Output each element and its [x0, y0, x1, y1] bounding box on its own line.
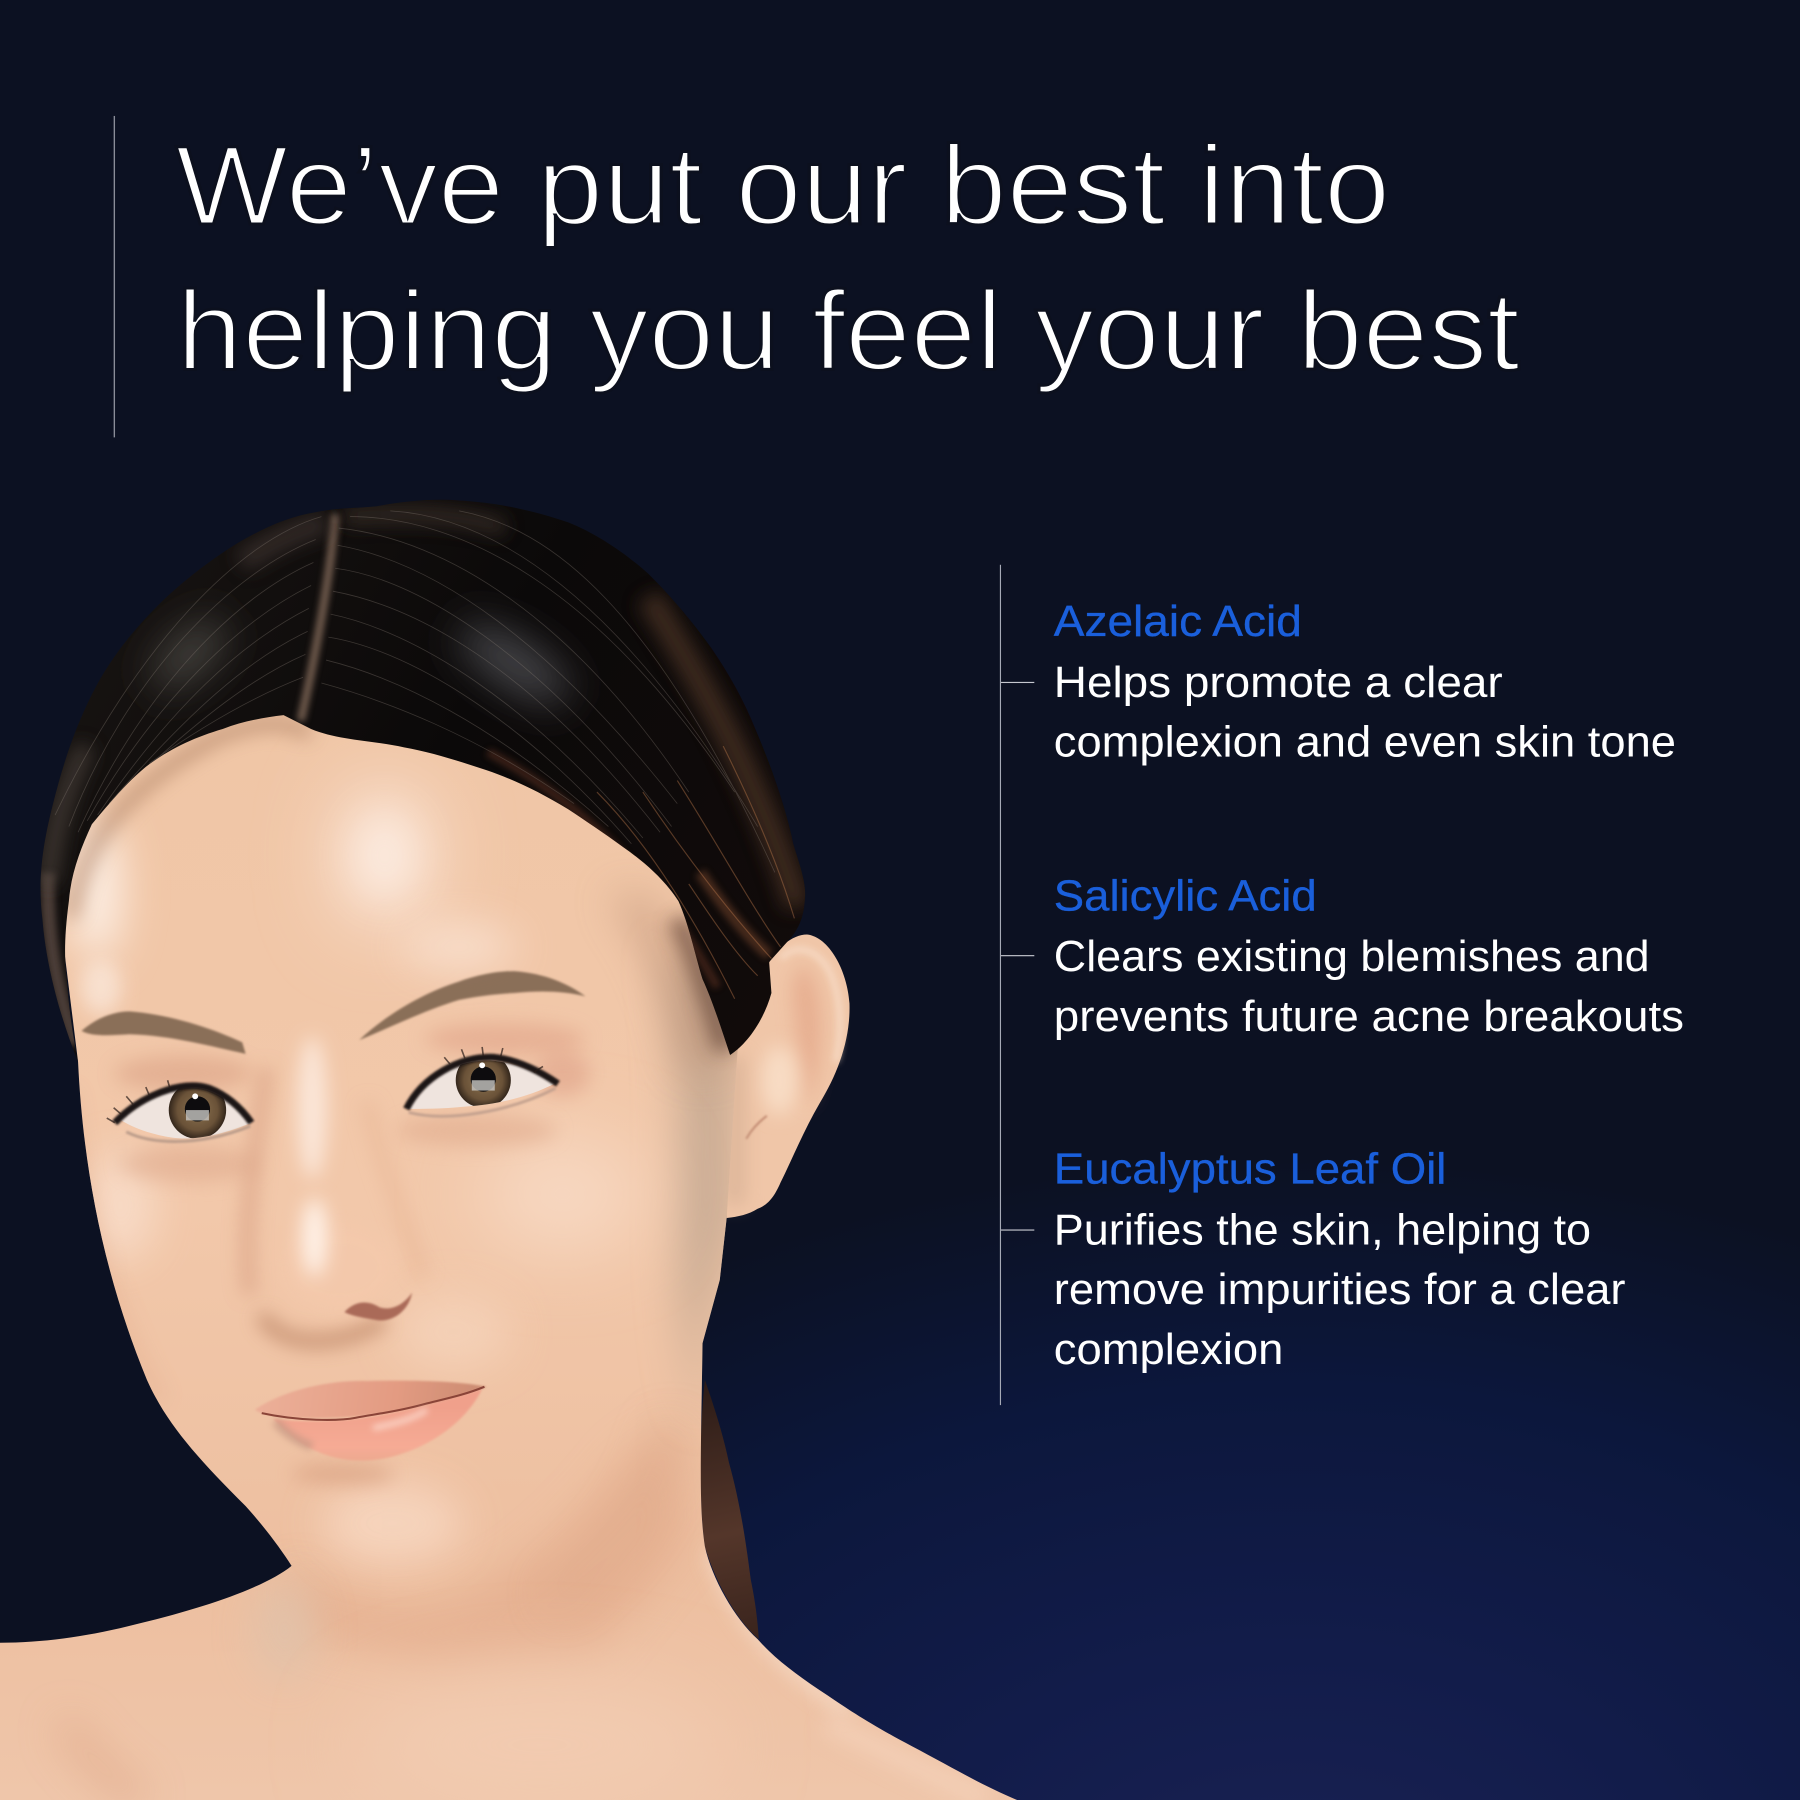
neck shading — [318, 1445, 688, 1659]
eye: right — [406, 1047, 558, 1116]
heading — [176, 122, 1520, 394]
ear — [723, 934, 850, 1218]
right side of face shadow — [666, 953, 735, 1423]
heading rule — [114, 116, 115, 437]
hair parting — [301, 514, 335, 721]
ingredient: Salicylic Acid: Salicylic Acid — [1054, 872, 1317, 920]
ingredient: Eucalyptus Leaf Oil: Eucalyptus Leaf Oil — [1054, 1146, 1446, 1194]
ingredient: Salicylic Acid — [1001, 872, 1684, 1041]
hair — [41, 500, 805, 1062]
ingredient: Eucalyptus Leaf Oil: complexion — [1054, 1326, 1283, 1374]
ponytail — [700, 1380, 759, 1639]
forehead and cheek highlights — [341, 784, 428, 926]
nose — [247, 1037, 422, 1341]
ingredient: Azelaic Acid: Helps promote a clear — [1054, 659, 1503, 707]
heading: We’ve put our best into — [176, 122, 1390, 248]
eyebrow: left — [82, 1011, 246, 1054]
ingredient: Eucalyptus Leaf Oil — [1001, 1146, 1626, 1374]
ingredient: Eucalyptus Leaf Oil: remove impurities for a clear — [1054, 1266, 1626, 1314]
ingredient: Salicylic Acid: Clears existing blemishes and — [1054, 933, 1650, 981]
heading: helping you feel your best — [177, 268, 1520, 394]
connector spine — [1000, 565, 1001, 1405]
portrait photo illustration — [0, 500, 1017, 1800]
soft hairline shadow — [71, 724, 310, 918]
lips — [255, 1381, 487, 1461]
face, neck and shoulders — [0, 677, 1017, 1800]
ingredients panel — [1000, 565, 1684, 1405]
hair strands — [55, 511, 775, 872]
ingredient: Eucalyptus Leaf Oil: Purifies the skin, helping to — [1054, 1206, 1591, 1254]
hair sheen — [449, 611, 580, 716]
ingredient: Azelaic Acid — [1001, 598, 1676, 767]
eyebrow: right — [359, 971, 585, 1040]
ingredient: Salicylic Acid: prevents future acne breakouts — [1054, 993, 1684, 1041]
ingredient: Azelaic Acid: Azelaic Acid — [1054, 598, 1302, 646]
ingredient: Azelaic Acid: complexion and even skin tone — [1054, 719, 1676, 767]
eye: left — [107, 1080, 251, 1142]
